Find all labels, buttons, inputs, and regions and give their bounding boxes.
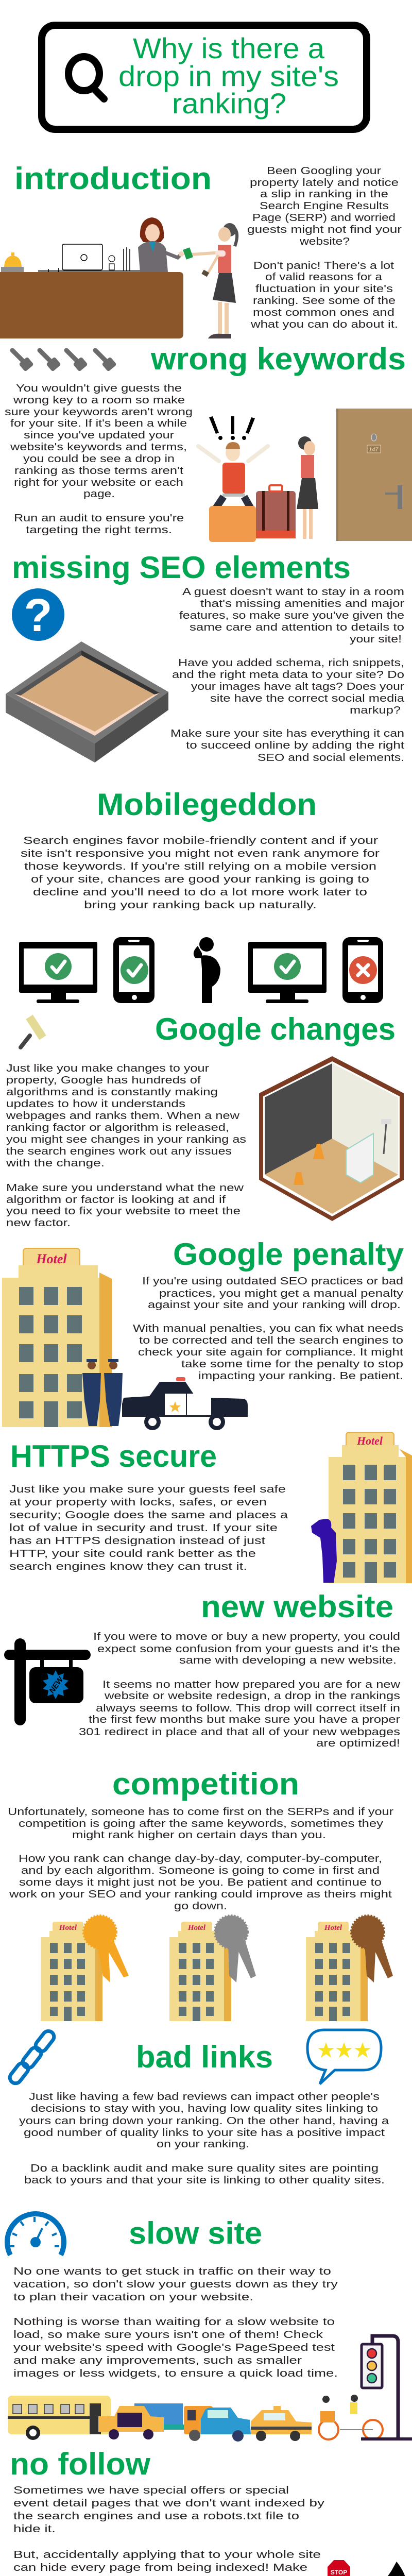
icon: phone check [113, 937, 154, 1003]
door: 147 [369, 447, 379, 453]
text: bad links: back to yours and that your site is linking to other quality sites. [24, 2175, 385, 2186]
icon row: devices [19, 937, 383, 1003]
text: Google changes: webpages and ranks them. When a new [6, 1110, 240, 1122]
text: competition: go down. [174, 1901, 227, 1912]
text: no follow: Sometimes we have special offers or special [13, 2485, 289, 2496]
guest [183, 223, 237, 338]
text: introduction: Don't panic! There's a lot [253, 260, 394, 272]
illustration: room under renovation [259, 1056, 404, 1221]
text: introduction: of valid reasons for a [265, 272, 383, 283]
text: Mobilegeddon: bring your ranking back up naturally. [84, 900, 317, 911]
illustration: empty room [6, 641, 168, 762]
text: competition: How you rank can change day-by-day, computer-by-computer, [19, 1853, 382, 1865]
icon: question mark: ? [24, 590, 52, 641]
text: Mobilegeddon: of your site, chances are good your ranking is going to [31, 874, 369, 885]
text: Google penalty [133, 1276, 404, 1382]
text: no follow: event detail pages that we don't want indexed by [13, 2498, 324, 2509]
text: HTTPS secure: Just like you make sure your guests feel safe [9, 1484, 286, 1495]
icon: confused person [194, 937, 220, 1003]
text: bad links: yours can bring down your ranking. On the other hand, having a [19, 2115, 389, 2127]
text: HTTPS secure [9, 1484, 288, 1572]
text: new website: If you were to move or buy a new property, you could [93, 1631, 400, 1642]
text: Google changes: with the change. [6, 1158, 105, 1169]
icon: laptop [38, 244, 140, 280]
text: introduction: property lately and notice [250, 177, 399, 189]
woman [297, 436, 318, 539]
text: wrong keywords: ranking as those terms aren't [14, 465, 184, 477]
icon: chain link [8, 2029, 56, 2086]
text: Google changes: you need to fix your website to meet the [6, 1206, 241, 1217]
heading: missing SEO elements: missing SEO elements [12, 550, 351, 585]
text: no follow: But, accidentally applying that to your whole site [13, 2549, 321, 2561]
text: Google changes [6, 1063, 246, 1229]
text: missing SEO elements: that's missing amenities and major [200, 598, 404, 609]
text: new website [79, 1631, 401, 1749]
text: Google changes: algorithms and is constantly making [6, 1087, 218, 1098]
text: introduction: most common ones and [253, 307, 394, 318]
text: wrong keywords: right for your website or each [14, 477, 183, 488]
text: new website: are optimized! [316, 1738, 400, 1749]
text: HTTPS secure: HTTP, your site could rank better as the [9, 1548, 256, 1560]
hotel building: Hotel [36, 1251, 67, 1266]
text: bad links: good number of quality links to your site has a positive impact [24, 2127, 385, 2139]
text: slow site: No one wants to get stuck in traffic on their way to [13, 2266, 331, 2277]
receptionist [138, 217, 184, 272]
container truck [134, 2403, 183, 2428]
police car [122, 1377, 248, 1430]
taxi [251, 2406, 312, 2441]
hotel bronze: Hotel [324, 1924, 342, 1932]
text: bad links [19, 2091, 389, 2186]
heading: Mobilegeddon: Mobilegeddon [97, 787, 317, 822]
icon: keys [12, 350, 117, 372]
text: Google changes: the search engines work out any issues [6, 1146, 232, 1157]
text: wrong keywords: you could be see a drop in [23, 453, 175, 465]
text: slow site: images or less widgets, to ensure a quick load time. [13, 2368, 338, 2379]
text: Google penalty: against your site and your ranking will drop. [148, 1299, 401, 1311]
text: wrong keywords: for your site. If it's been a while [10, 418, 187, 429]
text: new website: website or website redesign, a drop in the rankings [104, 1690, 400, 1702]
illustration: hotel with police [2, 1248, 248, 1430]
title text: ranking? [172, 87, 286, 120]
text: introduction: Been Googling your [267, 165, 381, 177]
road [341, 2562, 410, 2576]
text: Google changes: you might see changes in your ranking as [6, 1134, 246, 1145]
heading: introduction: introduction [14, 161, 212, 196]
text: Google changes: property, Google has hundreds of [6, 1075, 201, 1086]
hotel bronze [306, 1916, 393, 2021]
title box [42, 25, 367, 129]
illustration: traffic jam [8, 2336, 412, 2442]
text: Google penalty: check your site again for compliance. It might [138, 1347, 404, 1358]
text: wrong keywords: sure your keywords aren't wrong [5, 406, 193, 418]
exclamation marks [209, 416, 255, 440]
text: competition: work on your SEO and your ranking could improve as theirs might [9, 1889, 392, 1900]
text: missing SEO elements: same care and attention to details to [190, 622, 404, 633]
text: missing SEO elements: site have the correct social media [210, 693, 405, 704]
text: slow site: to plan their vacation on your website. [13, 2292, 253, 2303]
text: HTTPS secure: lot of value in security and trust. If your site [9, 1522, 278, 1534]
school bus [8, 2396, 111, 2440]
text: HTTPS secure: at your property with locks, safes, or even [9, 1497, 267, 1508]
illustration: hotel with security guard [311, 1432, 412, 1583]
hotel silver: Hotel [187, 1924, 206, 1932]
text: missing SEO elements: to succeed online by adding the right [186, 740, 405, 751]
text: competition: might rank higher on certain days than you. [72, 1829, 326, 1841]
text: missing SEO elements: your images have alt tags? Does your [191, 681, 404, 692]
text: Google penalty: With manual penalties, you can fix what needs [133, 1323, 403, 1334]
text: new website: same with developing a new website. [179, 1655, 397, 1666]
text: slow site: Nothing is worse than waiting for a slow website to [13, 2316, 335, 2328]
text: Google changes: Make sure you understand what the new [6, 1182, 244, 1194]
truck cab [184, 2406, 213, 2441]
stop sign: STOP [331, 2569, 347, 2576]
icon: new sign post: NEW [47, 1674, 65, 1695]
icon: paint roller [21, 1015, 46, 1047]
traffic light [361, 2336, 412, 2441]
heading: Google changes: Google changes [155, 1012, 396, 1046]
hotel silver [169, 1916, 256, 2021]
icon: review speech bubble [307, 2030, 381, 2084]
text: Google penalty: impacting your ranking. Be patient. [198, 1370, 403, 1382]
text: competition: competition is going after the same keywords, sometimes they [19, 1818, 383, 1829]
text: Google changes: updates to how it understands [6, 1098, 185, 1110]
heading: competition: competition [112, 1767, 299, 1801]
text: HTTPS secure: has an HTTPS designation instead of just [9, 1535, 266, 1547]
saluting guard [311, 1519, 337, 1583]
text: new website: always seems to follow. This drop will correct itself in [96, 1703, 400, 1714]
text: wrong keywords: wrong key to a room so make [13, 395, 185, 406]
text: no follow: hide it. [13, 2523, 56, 2535]
text: wrong keywords: website's keywords and terms, [10, 442, 187, 453]
title text [118, 32, 339, 120]
desk [0, 272, 183, 338]
text: Google penalty: to be corrected and tell the search engines to [139, 1335, 403, 1346]
text: introduction [247, 165, 402, 330]
hotel gold [41, 1916, 129, 2021]
text: introduction: Page (SERP) and worried [252, 212, 396, 224]
suitcase red [256, 485, 296, 538]
text: competition: Unfortunately, someone has to come first on the SERPs and if your [8, 1806, 393, 1818]
illustration: three hotels with ribbons [41, 1916, 393, 2021]
text: bad links: decisions to stay with you, having low quality sites linking to [31, 2103, 378, 2114]
illustration: frustrated guests at door [198, 409, 412, 542]
text: missing SEO elements [170, 586, 405, 764]
text: competition [8, 1806, 393, 1912]
text: Mobilegeddon: decline and you'll need to do a lot more work later to [33, 887, 367, 898]
rickshaw [319, 2395, 383, 2439]
text: Google changes: new factor. [6, 1217, 71, 1229]
text: new website: expect some confusion from your guests and it's the [97, 1643, 400, 1655]
icon: phone x [342, 937, 383, 1003]
text: Google penalty: If you're using outdated SEO practices or bad [142, 1276, 403, 1287]
text: no follow: can hide every page from being indexed! Make [13, 2562, 307, 2573]
man [198, 442, 268, 530]
text: no follow: the search engines and use a robots.txt file to [13, 2511, 299, 2522]
text: Mobilegeddon: Search engines favor mobile-friendly content and if your [23, 835, 378, 846]
heading: Google penalty: Google penalty [173, 1237, 404, 1272]
text: slow site: and make any improvements, such as smaller [13, 2355, 302, 2366]
text: slow site [13, 2266, 338, 2379]
heading: HTTPS secure: HTTPS secure [10, 1439, 217, 1473]
heading: new website: new website [201, 1589, 393, 1624]
text: no follow [13, 2485, 324, 2576]
text: missing SEO elements: and the right meta data to your site? Do [172, 669, 404, 681]
text: Mobilegeddon: those keywords. If you're still relying on a mobile version [24, 861, 376, 872]
text: Mobilegeddon [21, 835, 380, 911]
text: new website: It seems no matter how prepared you are for a new [102, 1679, 401, 1690]
text: HTTPS secure: security; Google does the same and places a [9, 1510, 288, 1521]
text: wrong keywords: You wouldn't give guests the [16, 383, 182, 394]
illustration: hotel with security guard: Hotel [356, 1434, 383, 1447]
text: slow site: your website's speed with Google's PageSpeed test [13, 2342, 335, 2353]
text: introduction: Search Engine Results [260, 200, 389, 212]
text: introduction: ranking. See some of the [253, 295, 396, 307]
heading: no follow: no follow [10, 2447, 150, 2481]
suitcase orange [209, 506, 256, 542]
hotel gold: Hotel [59, 1924, 77, 1932]
stop sign [327, 2560, 351, 2576]
text: bad links: on your ranking. [157, 2139, 249, 2150]
text: introduction: fluctuation in your site's [255, 283, 393, 295]
illustration: hotel front desk [0, 217, 237, 338]
text: new website: 301 redirect in place and that all of your new webpages [79, 1726, 400, 1738]
blue car [201, 2408, 251, 2442]
heading: slow site: slow site [129, 2216, 262, 2250]
hotel building [2, 1248, 112, 1427]
text: competition: some days it might just not be you. Be patient and continue to [19, 1877, 382, 1888]
text: Google changes: Just like you make changes to your [6, 1063, 209, 1074]
text: introduction: a slip in ranking in the [260, 189, 388, 200]
text: Google penalty: take some time for the penalty to stop [181, 1359, 403, 1370]
text: Google changes: ranking factor or algorithm is released, [6, 1122, 229, 1133]
icon: monitor check [19, 942, 97, 1003]
text: missing SEO elements: A guest doesn't want to stay in a room [182, 586, 404, 598]
door [336, 409, 412, 541]
text: wrong keywords: since you've updated your [24, 430, 174, 441]
text: introduction: website? [299, 236, 350, 247]
text: wrong keywords [5, 383, 193, 536]
text: missing SEO elements: markup? [350, 705, 401, 716]
text: wrong keywords: Run an audit to ensure you're [14, 513, 184, 524]
text: slow site: vacation, so don't slow your guests down as they try [13, 2279, 338, 2290]
text: Google penalty: practices, you might get a manual penalty [159, 1288, 403, 1299]
icon: new sign post [4, 1638, 91, 1725]
text: slow site: load, so make sure yours isn't one of them! Check [13, 2329, 323, 2341]
text: competition: and by each algorithm. Someone is going to come in first and [21, 1865, 380, 1876]
text: introduction: what you can do about it. [250, 319, 398, 330]
icon: question mark [12, 588, 64, 641]
icon: bell [1, 252, 24, 272]
text: missing SEO elements: Have you added schema, rich snippets, [178, 657, 404, 669]
icon: magnifier [68, 57, 104, 99]
text: new website: the first few months but make sure you have a proper [89, 1714, 400, 1725]
icon: monitor check 2 [248, 942, 327, 1003]
text: missing SEO elements: features, so make sure you've given the [179, 610, 404, 621]
orange car [98, 2406, 164, 2439]
text: bad links: Just like having a few bad reviews can impact other people's [29, 2091, 380, 2103]
text: wrong keywords: targeting the right terms. [26, 524, 172, 536]
text: introduction: guests might not find your [247, 224, 402, 235]
text: missing SEO elements: Make sure your site has everything it can [170, 728, 404, 739]
icon: speedometer [7, 2214, 64, 2255]
title text: Why is there a [133, 32, 325, 64]
text: HTTPS secure: search engines know they can trust it. [9, 1561, 247, 1572]
text: wrong keywords: page. [83, 488, 115, 500]
illustration: car, stop sign and road [247, 2560, 410, 2576]
heading: bad links: bad links [136, 2040, 273, 2074]
policemen [82, 1359, 123, 1426]
heading: wrong keywords: wrong keywords [150, 342, 406, 376]
text: missing SEO elements: SEO and social elements. [258, 752, 404, 764]
text: missing SEO elements: your site! [350, 634, 402, 645]
text: Mobilegeddon: site isn't responsive you might not even rank anymore for [21, 848, 380, 859]
title text: drop in my site's [118, 60, 339, 92]
text: bad links: Do a backlink audit and make sure quality sites are pointing [30, 2163, 379, 2174]
text: Google changes: algorithm or factor is looking at and if [6, 1194, 226, 1206]
